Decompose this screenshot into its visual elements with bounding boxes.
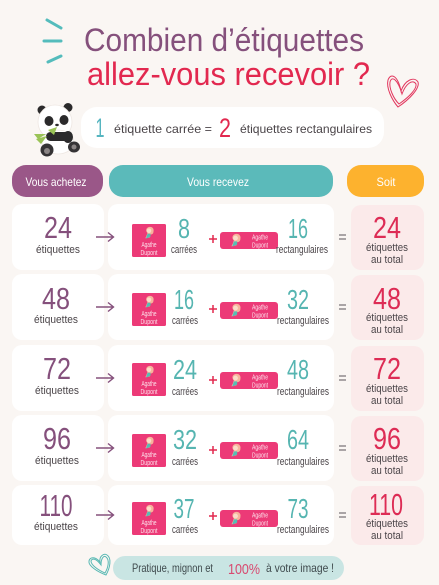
row: 24 labels: 24 (373, 210, 401, 245)
row: 24 labels: au total (371, 254, 403, 266)
title (84, 22, 370, 92)
row: 24 labels: rectangulaires (276, 244, 328, 256)
row: 48 labels: carrées (172, 315, 198, 327)
row: 110 labels: 110 (369, 487, 403, 522)
row: 96 labels (12, 415, 424, 481)
row: 48 labels: au total (371, 324, 403, 336)
title: Combien d’étiquettes (84, 22, 364, 58)
row: 48 labels: rectangulaires (277, 315, 329, 327)
row: 72 labels: 24 (173, 354, 197, 385)
row: 96 labels: étiquettes (35, 455, 79, 467)
row: 72 labels: 72 (373, 351, 401, 386)
row: 72 labels: Agathe (252, 374, 268, 382)
row: 110 labels: étiquettes (34, 521, 78, 533)
panel: conversion banner: étiquette carrée = (114, 122, 212, 136)
row: 110 labels: carrées (172, 524, 198, 536)
icon: hand-drawn heart (388, 76, 418, 107)
row: 110 labels: Agathe (252, 512, 268, 520)
row: 24 labels: étiquettes (366, 242, 408, 254)
row: 72 labels: étiquettes (35, 385, 79, 397)
row: 110 labels: rectangulaires (277, 524, 329, 536)
row: 72 labels: au total (371, 395, 403, 407)
row: 96 labels: Dupont (252, 452, 268, 460)
row: 48 labels: Agathe (252, 304, 268, 312)
row: 96 labels: au total (371, 465, 403, 477)
header: Vous recevez (109, 165, 333, 197)
header: Vous achetez: Vous achetez (26, 175, 86, 189)
row: 110 labels: au total (371, 530, 403, 542)
row: 72 labels: carrées (172, 386, 198, 398)
panel: conversion banner: étiquettes rectangulaires (240, 122, 372, 136)
row: 96 labels: rectangulaires (277, 456, 329, 468)
icon: teal sparkle strokes (44, 20, 61, 62)
row: 24 labels: Dupont (252, 242, 268, 250)
row: 96 labels: carrées (172, 456, 198, 468)
row: 24 labels (12, 204, 424, 270)
row: 110 labels: étiquettes (366, 518, 408, 530)
row: 110 labels: 110 (40, 488, 72, 523)
panel: conversion banner (81, 107, 384, 148)
row: 96 labels: 64 (287, 424, 309, 455)
row: 48 labels (12, 274, 424, 340)
row: 48 labels: 48 (373, 281, 401, 316)
row: 72 labels: rectangulaires (277, 386, 329, 398)
row: 110 labels: Dupont (140, 528, 158, 535)
row: 110 labels: 73 (288, 493, 308, 524)
title: allez-vous recevoir ? (87, 56, 370, 92)
row: 96 labels: étiquettes (366, 453, 408, 465)
row: 24 labels: étiquettes (36, 244, 80, 256)
row: 72 labels: 72 (43, 351, 71, 386)
row: 72 labels: Dupont (252, 382, 268, 390)
row: 48 labels: étiquettes (366, 312, 408, 324)
row: 72 labels: étiquettes (366, 383, 408, 395)
row: 72 labels: 48 (287, 354, 309, 385)
row: 110 labels (12, 485, 424, 545)
row: 110 labels: Dupont (252, 520, 268, 528)
row: 24 labels: carrées (171, 244, 197, 256)
header: Soit (347, 165, 424, 197)
row: 24 labels: Agathe (252, 234, 268, 242)
row: 72 labels (12, 345, 424, 411)
row: 24 labels: Agathe (142, 242, 157, 249)
header: Vous recevez: Vous recevez (187, 175, 249, 189)
panel: conversion banner: 2 (219, 113, 231, 143)
header: Soit: Soit (376, 175, 396, 189)
row: 48 labels: Dupont (140, 319, 158, 326)
row: 48 labels: Agathe (142, 311, 157, 318)
header: Vous achetez (12, 165, 103, 197)
row: 110 labels: Agathe (142, 520, 157, 527)
row: 24 labels: 8 (178, 213, 190, 244)
row: 72 labels: Dupont (140, 389, 158, 396)
footer tagline: 100% (228, 561, 260, 578)
icon: teal heart (89, 554, 110, 575)
row: 96 labels: Dupont (140, 460, 158, 467)
row: 48 labels: 16 (174, 284, 194, 315)
row: 96 labels: 96 (43, 421, 71, 456)
row: 110 labels: 37 (174, 493, 194, 524)
row: 48 labels: Dupont (252, 312, 268, 320)
row: 96 labels: 32 (173, 424, 197, 455)
row: 96 labels: 96 (373, 421, 401, 456)
row: 24 labels: 16 (288, 213, 308, 244)
panel: conversion banner: 1 (96, 113, 104, 143)
row: 72 labels: Agathe (142, 381, 157, 388)
footer tagline: à votre image ! (266, 561, 334, 575)
row: 24 labels: 24 (44, 210, 72, 245)
icon: panda with bamboo (34, 103, 80, 156)
footer tagline (113, 556, 344, 580)
row: 24 labels: Dupont (140, 250, 158, 257)
row: 48 labels: étiquettes (34, 314, 78, 326)
row: 48 labels: 48 (42, 281, 70, 316)
row: 96 labels: Agathe (142, 452, 157, 459)
footer tagline: Pratique, mignon et (132, 561, 214, 575)
row: 48 labels: 32 (287, 284, 309, 315)
row: 96 labels: Agathe (252, 444, 268, 452)
